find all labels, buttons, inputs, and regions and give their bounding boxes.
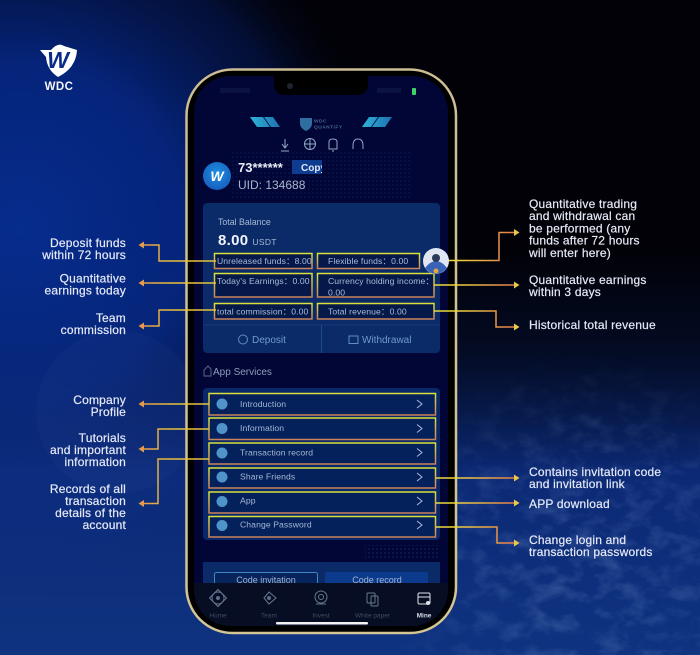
label: change passwords: Change login and [529, 533, 626, 547]
row: introduction [209, 394, 436, 415]
label: change passwords: transaction passwords [529, 545, 653, 559]
arrow: total revenue [434, 311, 520, 330]
tab: team: Team [261, 612, 277, 620]
label: quantitative trading: Quantitative trading [529, 197, 637, 211]
app header logo: QUANTIFY [314, 124, 343, 130]
label: invitation: and invitation link [529, 477, 626, 491]
logo: WDC: WDC [45, 81, 73, 93]
header icons [281, 138, 363, 151]
row: change password: Change Password [240, 520, 312, 530]
arrow: team commission [138, 310, 216, 330]
app header logo: WDC [314, 118, 327, 124]
user avatar [203, 162, 231, 190]
partial invitation card [203, 562, 440, 583]
todays earnings: Today's Earnings：0.00 [217, 276, 310, 286]
tab bar [194, 583, 448, 626]
label: team commission: commission [61, 323, 126, 337]
logo: WDC: W [47, 47, 71, 73]
total revenue [318, 304, 434, 319]
arrow: flexible funds [430, 229, 520, 260]
copy button [292, 160, 322, 174]
label: tutorials: Tutorials [79, 431, 126, 445]
tab: invest [312, 591, 330, 620]
left annotation arrows [138, 242, 216, 507]
label: app download: APP download [529, 497, 610, 511]
app services heading: App Services [213, 367, 272, 378]
deposit button: Deposit [252, 335, 286, 346]
row: app [209, 492, 436, 513]
flexible funds: Flexible funds：0.00 [328, 256, 408, 266]
label: team commission: Team [96, 311, 126, 325]
row: transaction record [209, 443, 436, 464]
partial invitation card: Code invitation [236, 575, 296, 585]
left labels [41, 236, 126, 532]
label: invitation: Contains invitation code [529, 465, 661, 479]
row: share friends [209, 468, 436, 488]
right annotation arrows [430, 229, 520, 546]
user avatar: W [210, 168, 225, 184]
phone body and frame [186, 70, 456, 633]
label: earnings within 3 days: Quantitative earnings [529, 273, 647, 287]
phone screen [194, 73, 448, 626]
label: quantitative trading: funds after 72 hours [529, 234, 640, 248]
uid: UID: 134688 [238, 178, 306, 192]
label: records: account [83, 518, 126, 532]
arrow: deposit funds [138, 242, 216, 261]
withdrawal button [348, 336, 411, 344]
currency holding income [318, 274, 434, 298]
total revenue: Total revenue：0.00 [328, 306, 407, 316]
unreleased funds: Unreleased funds：8.00 [217, 256, 312, 266]
label: tutorials: information [64, 455, 126, 469]
tab: invest: Invest [312, 612, 330, 620]
partial invitation card: Code record [352, 575, 402, 585]
tab: mine: Mine [417, 612, 432, 620]
tab: white paper [355, 593, 391, 620]
logo: WDC [40, 45, 77, 93]
row: share friends: Share Friends [240, 472, 295, 482]
label: records: transaction [65, 494, 126, 508]
tab: home: Home [209, 612, 227, 620]
panel: balance card [203, 203, 440, 353]
copy button: Copy [301, 163, 326, 174]
phone [186, 70, 456, 633]
right labels [528, 197, 661, 559]
label: quantitative trading: will enter here) [528, 246, 611, 260]
todays earnings [214, 274, 312, 297]
currency holding income: 0.00 [328, 288, 345, 298]
notch [274, 76, 368, 95]
label: records: details of the [55, 506, 126, 520]
tab: white paper: White paper [355, 612, 391, 620]
row: information [209, 418, 436, 440]
total commission: total commission：0.00 [217, 306, 309, 316]
label: historical revenue: Historical total revenue [529, 318, 656, 332]
arrow: company profile [138, 400, 209, 408]
label: earnings today: earnings today [44, 284, 126, 298]
arrow: records [138, 459, 209, 507]
label: deposit funds: within 72 hours [41, 248, 126, 262]
row: introduction: Introduction [240, 399, 286, 409]
arrow: app [436, 500, 520, 506]
arrow: tutorials [138, 429, 209, 452]
panel: app services list [203, 388, 440, 540]
label: company profile: Profile [91, 405, 126, 419]
arrow: share friends [436, 474, 520, 482]
label: earnings within 3 days: within 3 days [528, 285, 601, 299]
arrow: currency holding income [434, 282, 520, 288]
unreleased funds [214, 254, 312, 268]
row: app: App [240, 496, 256, 506]
label: earnings today: Quantitative [60, 272, 126, 286]
flexible funds [318, 254, 420, 268]
tab: team [261, 592, 277, 620]
app header logo [250, 117, 392, 131]
row: transaction record: Transaction record [240, 448, 313, 458]
balance amount: 8.00 USDT [218, 232, 277, 249]
label: company profile: Company [73, 393, 126, 407]
row: change password [209, 516, 436, 537]
status bar [220, 88, 416, 95]
home indicator [276, 622, 368, 624]
user id: 73****** [238, 160, 284, 175]
tab: mine [417, 593, 432, 620]
total commission [214, 304, 312, 319]
label: records: Records of all [50, 482, 126, 496]
tab: home [209, 590, 227, 620]
arrow: change password [436, 527, 520, 546]
floating support avatar [423, 248, 449, 274]
label: deposit funds: Deposit funds [50, 236, 126, 250]
total balance label: Total Balance [218, 217, 271, 227]
label: tutorials: and important [50, 443, 126, 457]
label: quantitative trading: be performed (any [529, 221, 630, 235]
row: information: Information [240, 423, 284, 433]
label: quantitative trading: and withdrawal can [529, 209, 635, 223]
withdrawal button: Withdrawal [362, 335, 411, 346]
arrow: quantitative earnings today [138, 280, 216, 286]
currency holding income: Currency holding income： [328, 276, 434, 286]
